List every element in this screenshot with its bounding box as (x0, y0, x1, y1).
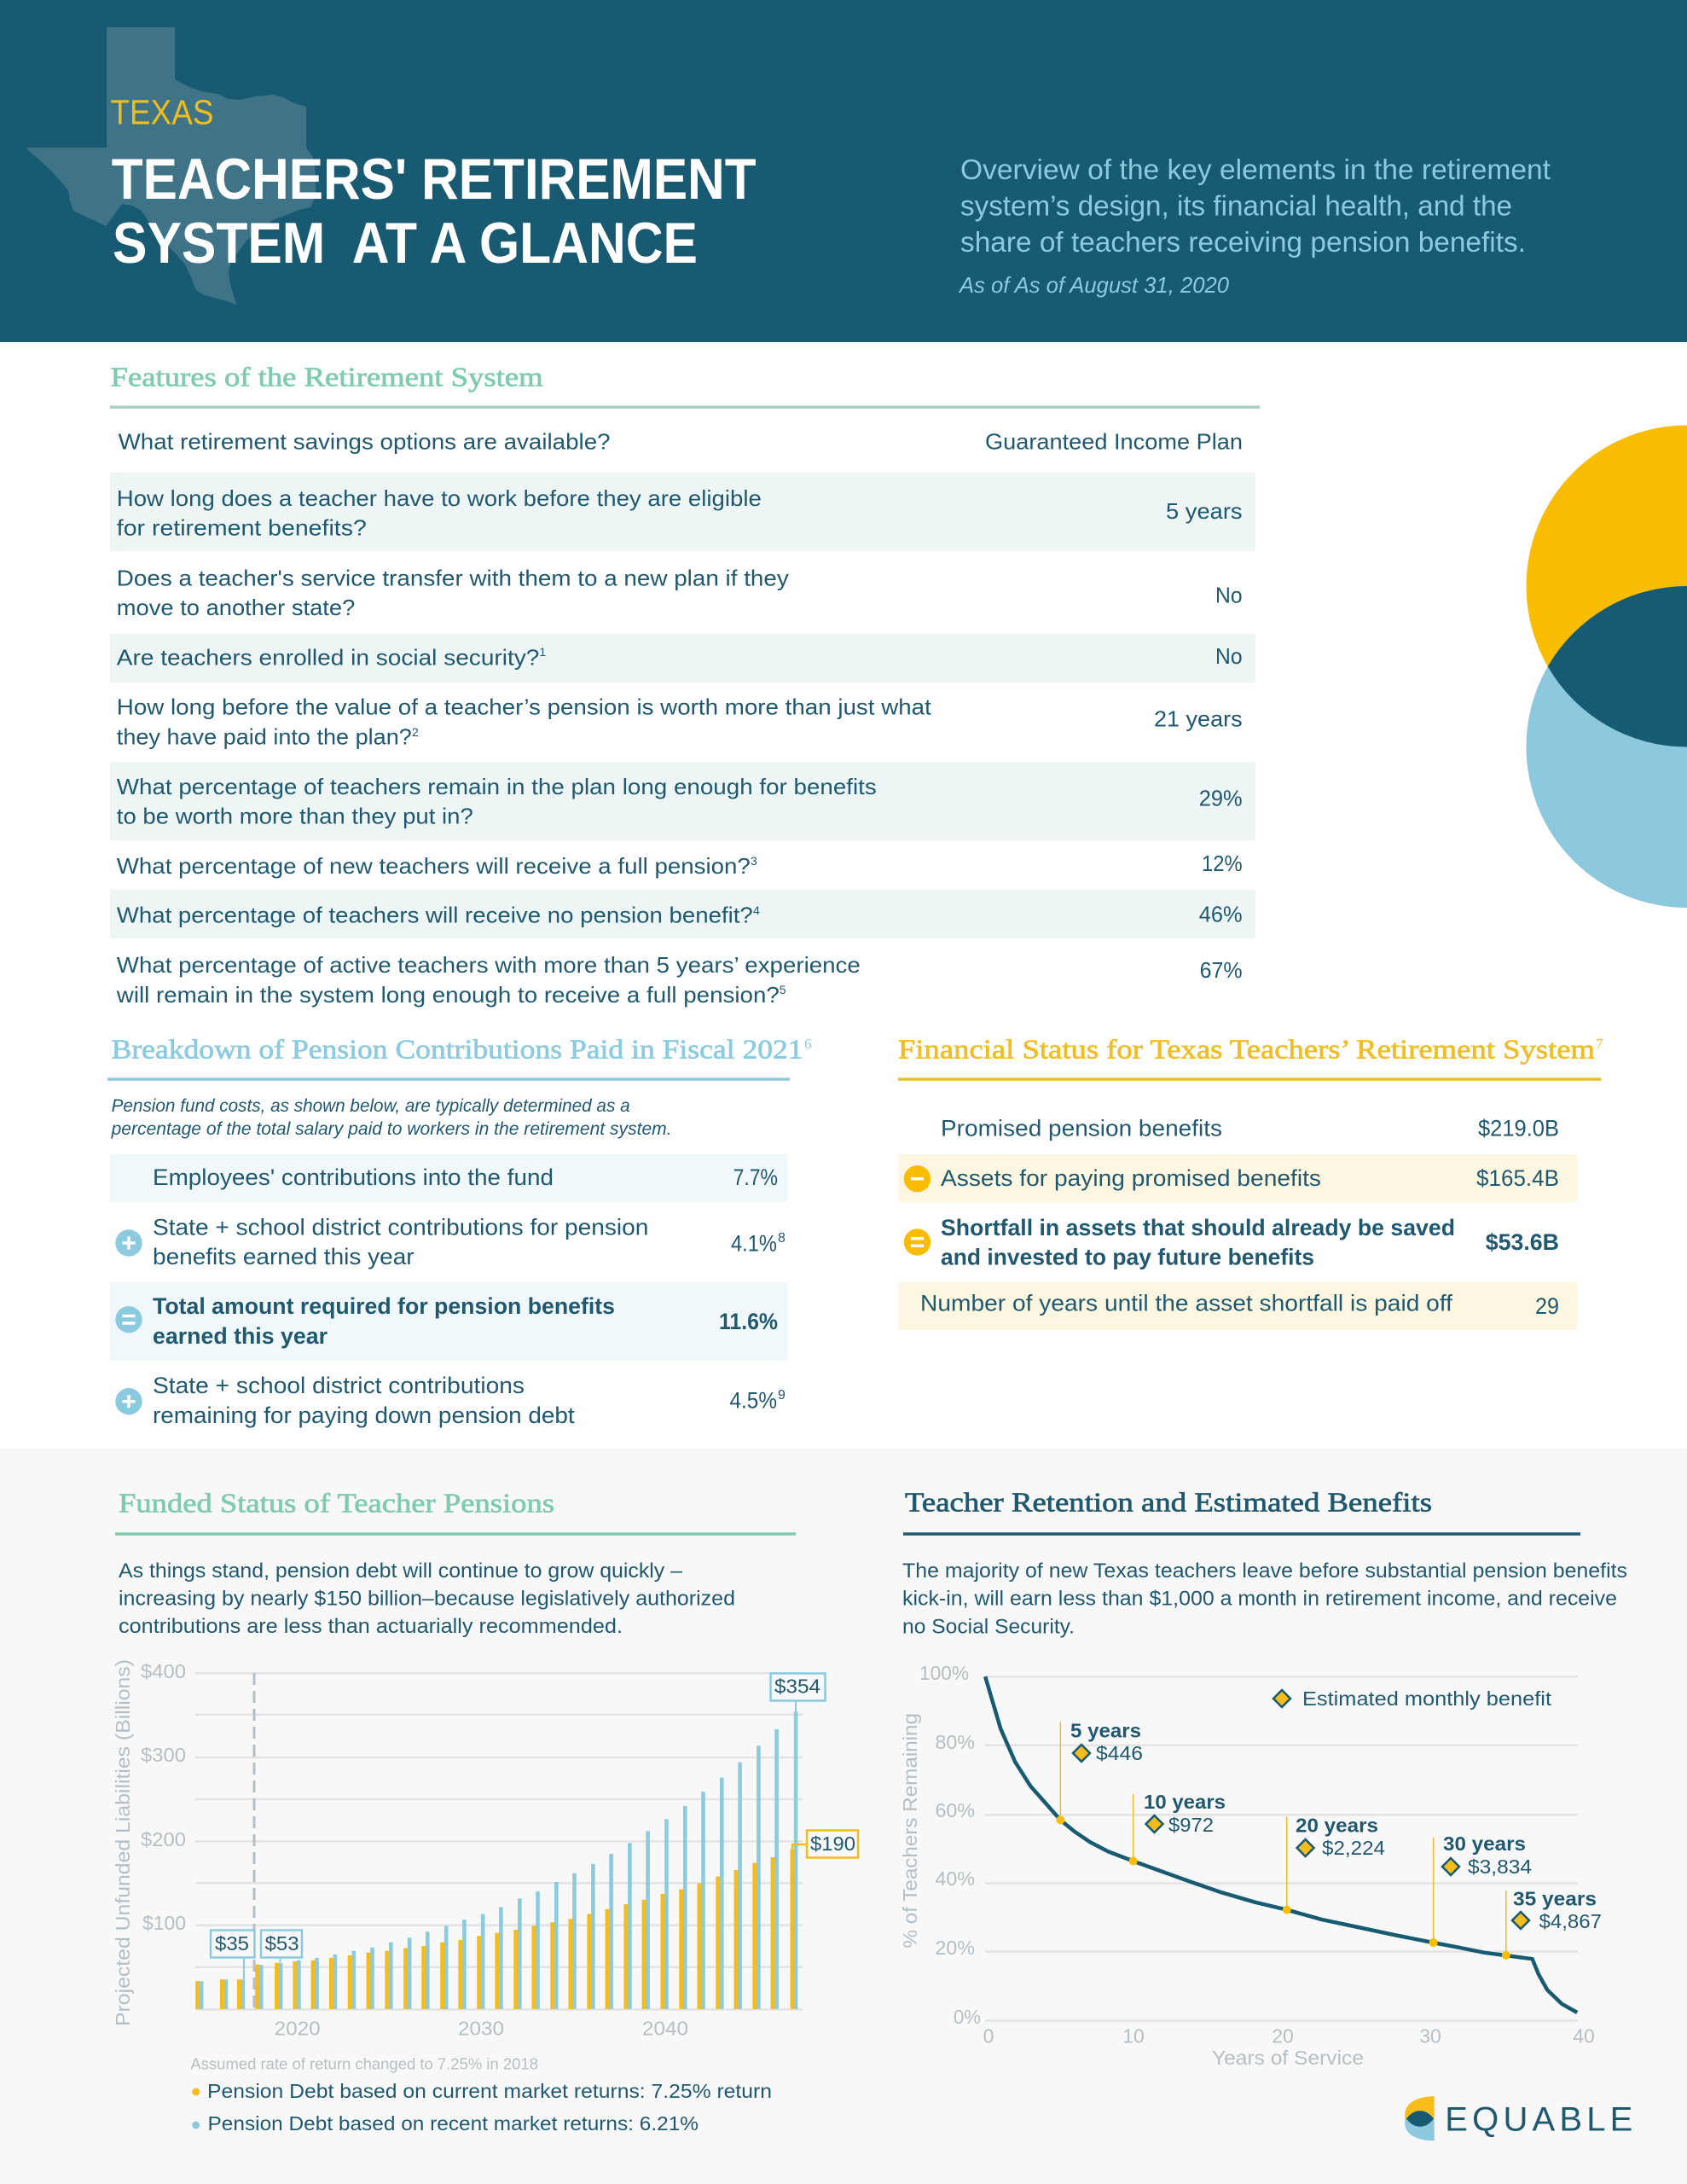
row: pension worth: 21 years (1154, 706, 1243, 732)
row: social security: 1 (539, 645, 546, 659)
marker: 10 years: $972 (1168, 1814, 1214, 1836)
row: debt contributions: 9 (778, 1388, 786, 1403)
row: full pension: What percentage of new teachers will receive a full pension? (117, 853, 751, 879)
title (112, 147, 757, 276)
row: service transfer: move to another state? (117, 595, 355, 620)
panel: funded status of teacher pensions (112, 1487, 858, 2135)
row: active teachers: 5 (780, 983, 786, 996)
row: social security: Are teachers enrolled in social security? (117, 644, 539, 670)
row: pension worth: How long before the value of a teacher’s pension is worth more than just what (117, 694, 932, 719)
row: years until paid off (898, 1282, 1578, 1330)
callout: $53 (261, 1930, 302, 1962)
row: no pension benefit: 4 (753, 903, 760, 917)
icon: Texas state silhouette (27, 27, 316, 305)
marker: 5 years: 5 years (1070, 1720, 1141, 1742)
heading: breakdown: 6 (804, 1036, 812, 1052)
row: assets: $165.4B (1476, 1165, 1559, 1191)
row: normal cost contributions (115, 1215, 786, 1269)
row: active teachers: 67% (1200, 957, 1243, 983)
icon: equals (115, 1306, 142, 1333)
retention curve (985, 1676, 1577, 2013)
marker: 35 years: $4,867 (1539, 1910, 1602, 1932)
marker: 20 years: 20 years (1296, 1815, 1378, 1837)
legend: 7.25% return: Pension Debt based on current market returns: 7.25% return (207, 2080, 772, 2102)
title: SYSTEM AT A GLANCE (113, 211, 698, 276)
row: employees contributions: Employees' contributions into the fund (153, 1165, 554, 1190)
row: eligibility: for retirement benefits? (117, 515, 367, 541)
heading: funded status: Funded Status of Teacher Pensions (119, 1487, 554, 1518)
heading: features: Features of the Retirement System (111, 361, 543, 392)
intro note (111, 1096, 672, 1139)
bar chart: projected unfunded liabilities (112, 1659, 858, 2039)
y-axis labels: 20% (935, 1937, 975, 1959)
row: total amount: 11.6% (719, 1309, 778, 1334)
callout: $35 (211, 1930, 254, 1979)
x-axis labels: 20 (1272, 2025, 1294, 2048)
logo: Equable (1405, 2096, 1632, 2140)
funded status description: contributions are less than actuarially recommended. (119, 1615, 623, 1638)
row: pension worth: they have paid into the plan? (117, 724, 412, 750)
row: shortfall (904, 1215, 1559, 1270)
panel: financial status (898, 1034, 1603, 1330)
row: employees contributions: 7.7% (733, 1165, 778, 1190)
row: percent remain: 29% (1199, 785, 1243, 810)
row: debt contributions (115, 1373, 786, 1428)
row: eligibility: 5 years (1166, 498, 1243, 524)
row: normal cost contributions: 4.1% (731, 1231, 777, 1257)
retention description (902, 1560, 1627, 1638)
callout: $53: $53 (265, 1932, 299, 1955)
marker: 30 years: 30 years (1443, 1833, 1526, 1855)
row: shortfall: $53.6B (1486, 1229, 1559, 1255)
callout: $354 (771, 1674, 826, 1711)
header description: Overview of the key elements in the retirement (960, 154, 1551, 185)
icon: equals (904, 1228, 930, 1256)
x-axis labels: 10 (1122, 2025, 1145, 2048)
row: no pension benefit (110, 890, 1255, 938)
logo: Equable: EQUABLE (1445, 2101, 1632, 2139)
marker: 20 years (1283, 1815, 1385, 1914)
marker: 35 years (1502, 1888, 1602, 1960)
icon: minus (904, 1165, 930, 1192)
row: eligibility: How long does a teacher have to work before they are eligible (117, 485, 762, 511)
row: savings options (119, 429, 1243, 455)
kicker: TEXAS: TEXAS (111, 93, 213, 132)
header description (960, 154, 1551, 258)
heading: financial status: 7 (1596, 1036, 1603, 1052)
row: years until paid off: 29 (1535, 1293, 1559, 1319)
y-axis labels: 40% (935, 1867, 975, 1890)
lower section background (0, 1449, 1687, 2184)
y-axis labels (919, 1662, 981, 2028)
retention description: kick-in, will earn less than $1,000 a month in retirement income, and receive (902, 1588, 1617, 1611)
row: total amount: earned this year (153, 1323, 328, 1349)
header description: system’s design, its financial health, and the (960, 190, 1512, 222)
marker: 5 years: $446 (1096, 1742, 1143, 1764)
decorative overlapping circles (1527, 425, 1687, 908)
line chart: teachers remaining (899, 1662, 1602, 2069)
funded status description: increasing by nearly $150 billion–because legislatively authorized (119, 1588, 735, 1611)
row: service transfer: No (1215, 583, 1243, 608)
y-axis labels: $400 (141, 1660, 186, 1682)
funded status description (119, 1560, 735, 1638)
row: pension worth (117, 694, 1243, 750)
row: normal cost contributions: 8 (778, 1231, 786, 1246)
marker: 30 years: $3,834 (1468, 1856, 1532, 1878)
callout: $35: $35 (215, 1932, 249, 1955)
row: promised benefits: Promised pension benefits (941, 1116, 1222, 1141)
marker: 20 years: $2,224 (1322, 1837, 1385, 1859)
marker: 5 years (1056, 1720, 1143, 1824)
row: full pension (117, 851, 1243, 879)
heading: retention: Teacher Retention and Estimated Benefits (905, 1487, 1432, 1518)
legend: estimated monthly benefit: Estimated monthly benefit (1302, 1687, 1552, 1710)
x-axis labels: 2020 (275, 2017, 321, 2039)
row: percent remain (110, 762, 1255, 840)
funded status description: As things stand, pension debt will continue to grow quickly – (119, 1560, 683, 1583)
row: employees contributions (110, 1154, 787, 1202)
row: percent remain: What percentage of teachers remain in the plan long enough for benefits (117, 774, 877, 799)
x-axis labels (275, 2017, 688, 2039)
row: normal cost contributions: benefits earned this year (153, 1244, 415, 1269)
row: active teachers: What percentage of active teachers with more than 5 years’ experience (117, 952, 861, 978)
x-axis labels: 2040 (642, 2017, 688, 2039)
y-axis title: % of Teachers Remaining (899, 1713, 921, 1949)
row: debt contributions: 4.5% (730, 1388, 777, 1414)
header description: share of teachers receiving pension benefits. (960, 226, 1526, 258)
row: service transfer: Does a teacher's service transfer with them to a new plan if they (117, 566, 789, 591)
intro note: percentage of the total salary paid to workers in the retirement system. (111, 1119, 672, 1139)
y-axis labels (141, 1660, 186, 1934)
intro note: Pension fund costs, as shown below, are typically determined as a (112, 1096, 630, 1116)
icon: plus (115, 1229, 142, 1257)
row: assets (898, 1154, 1578, 1202)
marker: 10 years: 10 years (1144, 1791, 1226, 1813)
row: full pension: 3 (751, 854, 757, 868)
row: years until paid off: Number of years until the asset shortfall is paid off (920, 1291, 1453, 1316)
x-axis labels (983, 2025, 1595, 2048)
row: assets: Assets for paying promised benefits (941, 1165, 1321, 1191)
y-axis labels: 100% (919, 1662, 969, 1684)
row: eligibility (110, 473, 1255, 551)
x-axis labels: 2030 (458, 2017, 504, 2039)
y-axis labels: 0% (954, 2006, 981, 2028)
dashed marker: 2018 assumption change (252, 1673, 256, 2009)
marker: 10 years (1129, 1791, 1226, 1865)
x-axis labels: 40 (1573, 2025, 1595, 2048)
row: total amount: Total amount required for pension benefits (153, 1293, 615, 1319)
y-axis labels: 60% (935, 1799, 975, 1821)
bars: 7.25% return (198, 1849, 792, 2009)
row: active teachers (116, 952, 1243, 1008)
panel: features of the retirement system (110, 361, 1260, 1008)
row: shortfall: Shortfall in assets that should already be saved (941, 1215, 1455, 1240)
bars: 6.21% return (201, 1711, 796, 2009)
panel: teacher retention and estimated benefits (899, 1487, 1627, 2069)
row: no pension benefit: What percentage of teachers will receive no pension benefit? (117, 903, 753, 928)
row: promised benefits: $219.0B (1478, 1116, 1559, 1141)
y-axis title: Projected Unfunded Liabilities (Billions) (112, 1659, 134, 2026)
y-axis labels: $300 (141, 1744, 186, 1766)
row: debt contributions: State + school district contributions (153, 1373, 525, 1398)
row: percent remain: to be worth more than they put in? (117, 804, 473, 829)
y-axis labels: 80% (935, 1731, 975, 1753)
header banner (0, 0, 1687, 342)
heading: financial status: Financial Status for Texas Teachers’ Retirement System (898, 1034, 1595, 1065)
x-axis title: Years of Service (1212, 2047, 1364, 2069)
row: savings options: What retirement savings options are available? (119, 429, 611, 455)
as-of date: As of As of August 31, 2020 (958, 272, 1230, 298)
x-axis labels: 30 (1419, 2025, 1441, 2048)
row: pension worth: 2 (412, 725, 419, 739)
row: social security: No (1215, 643, 1243, 669)
legend: 6.21% return: Pension Debt based on recent market returns: 6.21% (208, 2112, 699, 2135)
heading: breakdown: Breakdown of Pension Contributions Paid in Fiscal 2021 (112, 1034, 803, 1065)
row: social security (110, 634, 1255, 682)
callout: $190 (792, 1831, 858, 1858)
callout: $354: $354 (774, 1676, 820, 1698)
title: TEACHERS' RETIREMENT (112, 147, 757, 212)
row: normal cost contributions: State + school district contributions for pension (153, 1215, 648, 1240)
retention description: no Social Security. (902, 1615, 1075, 1638)
y-axis labels: $100 (142, 1912, 186, 1934)
panel: breakdown of pension contributions (107, 1034, 812, 1428)
retention description: The majority of new Texas teachers leave before substantial pension benefits (902, 1560, 1627, 1583)
y-axis labels: $200 (141, 1828, 186, 1850)
row: active teachers: will remain in the system long enough to receive a full pension? (116, 982, 780, 1008)
x-axis labels: 0 (983, 2025, 994, 2048)
row: promised benefits (941, 1116, 1559, 1141)
marker: 30 years (1429, 1833, 1532, 1947)
row: debt contributions: remaining for paying down pension debt (153, 1403, 575, 1428)
marker: 35 years: 35 years (1513, 1888, 1597, 1910)
callout: $190: $190 (810, 1833, 855, 1855)
row: no pension benefit: 46% (1199, 902, 1243, 927)
row: total amount (110, 1282, 787, 1361)
row: savings options: Guaranteed Income Plan (985, 429, 1243, 455)
row: service transfer (117, 566, 1243, 620)
row: shortfall: and invested to pay future benefits (941, 1245, 1314, 1270)
chart note: Assumed rate of return changed to 7.25% in 2018 (190, 2056, 538, 2073)
icon: plus (115, 1388, 142, 1414)
row: full pension: 12% (1202, 851, 1243, 876)
